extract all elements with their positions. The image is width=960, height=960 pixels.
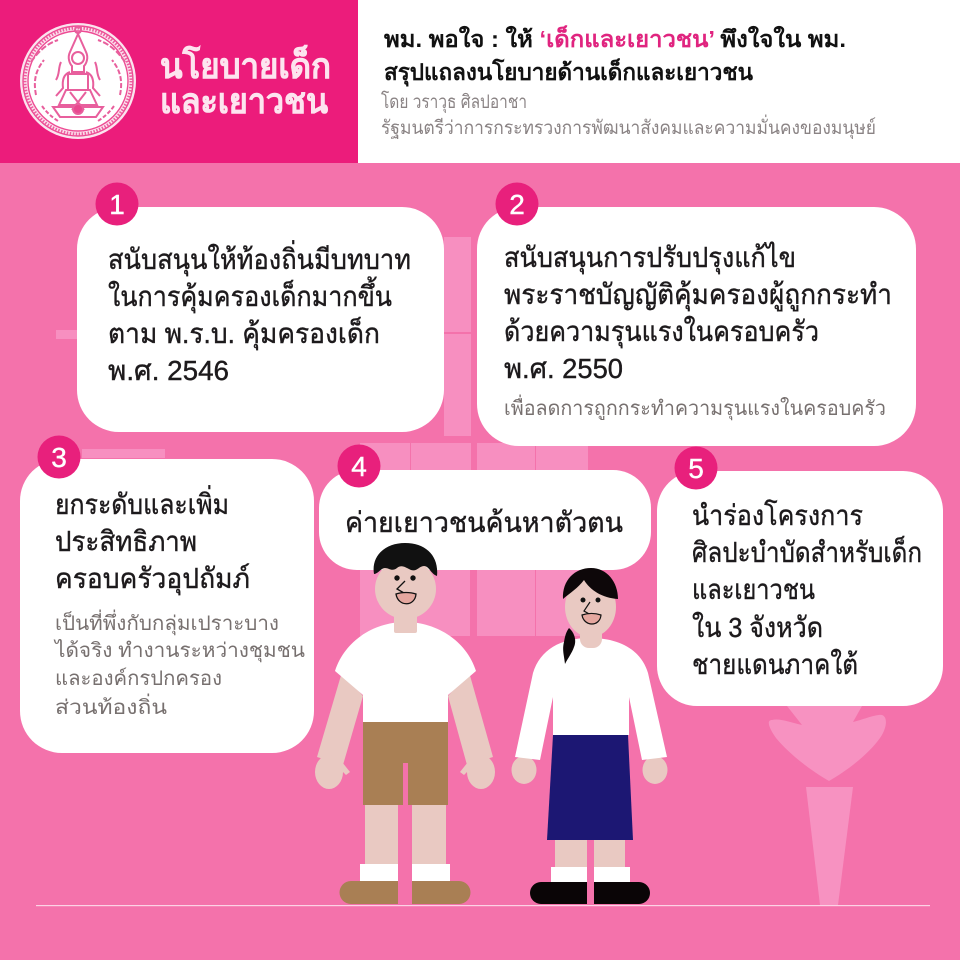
- panel 5: นำร่องโครงการ: [692, 499, 863, 531]
- panel 5: ศิลปะบำบัดสำหรับเด็ก: [692, 535, 922, 568]
- badge 3: 3: [51, 442, 67, 473]
- panel 5: [657, 446, 943, 706]
- badge 1: [96, 182, 138, 226]
- headline: [384, 24, 846, 87]
- panel 3: ประสิทธิภาพ: [55, 526, 197, 557]
- byline: รัฐมนตรีว่าการกระทรวงการพัฒนาสังคมและความมั่นคงของมนุษย์: [381, 114, 876, 140]
- panel 3: ส่วนท้องถิ่น: [55, 693, 167, 719]
- panel 1: ตาม พ.ร.บ. คุ้มครองเด็ก: [108, 316, 380, 351]
- headline: สรุปแถลงนโยบายด้านเด็กและเยาวชน: [384, 57, 753, 87]
- panel 5: และเยาวชน: [692, 574, 815, 605]
- panel 1: [77, 182, 444, 432]
- panel 3: เป็นที่พึ่งกับกลุ่มเปราะบาง: [55, 609, 279, 636]
- badge 2: [496, 182, 538, 226]
- panel 1: ในการคุ้มครองเด็กมากขึ้น: [108, 276, 392, 314]
- decorative flower: [769, 706, 886, 905]
- byline: โดย วราวุธ ศิลปอาชา: [381, 90, 527, 114]
- badge 3: [38, 436, 80, 478]
- logo seal: [20, 23, 136, 139]
- panel 2: สนับสนุนการปรับปรุงแก้ไข: [504, 242, 796, 275]
- badge 2: 2: [509, 189, 525, 220]
- ground line: [36, 905, 930, 906]
- panel 3: และองค์กรปกครอง: [55, 667, 222, 690]
- panel 2: เพื่อลดการถูกกระทำความรุนแรงในครอบครัว: [504, 394, 886, 421]
- panel 5: ใน 3 จังหวัด: [692, 611, 823, 643]
- panel 4: ค่ายเยาวชนค้นหาตัวตน: [345, 507, 623, 538]
- panel 2: พระราชบัญญัติคุ้มครองผู้ถูกกระทำ: [504, 279, 892, 312]
- panel 2: [477, 182, 916, 446]
- panel 3: [20, 436, 314, 753]
- badge 5: 5: [688, 453, 704, 484]
- badge 4: [338, 444, 380, 488]
- header title: นโยบายเด็ก: [160, 44, 331, 86]
- boy figure: [315, 543, 495, 904]
- badge 5: [674, 446, 718, 490]
- panel 3: ยกระดับและเพิ่ม: [55, 485, 229, 520]
- panel 5: ชายแดนภาคใต้: [692, 648, 858, 680]
- header band: [0, 0, 960, 163]
- badge 1: 1: [109, 189, 125, 220]
- panel 3: ได้จริง ทำงานระหว่างชุมชน: [53, 639, 305, 663]
- panel 4: [319, 444, 651, 570]
- panel 2: ด้วยความรุนแรงในครอบครัว: [504, 315, 819, 349]
- panel 1: พ.ศ. 2546: [108, 355, 229, 386]
- byline: [381, 90, 876, 140]
- panel 3: ครอบครัวอุปถัมภ์: [55, 563, 250, 596]
- girl figure: [512, 568, 668, 904]
- panel 2: พ.ศ. 2550: [504, 353, 623, 384]
- header title: และเยาวชน: [160, 82, 328, 121]
- headline: พม. พอใจ : ให้ ‘เด็กและเยาวชน’ พึงใจใน พม.: [384, 24, 846, 52]
- panel 1: สนับสนุนให้ท้องถิ่นมีบทบาท: [108, 240, 411, 277]
- background building: [56, 237, 588, 636]
- badge 4: 4: [351, 451, 367, 482]
- header title: [160, 44, 331, 121]
